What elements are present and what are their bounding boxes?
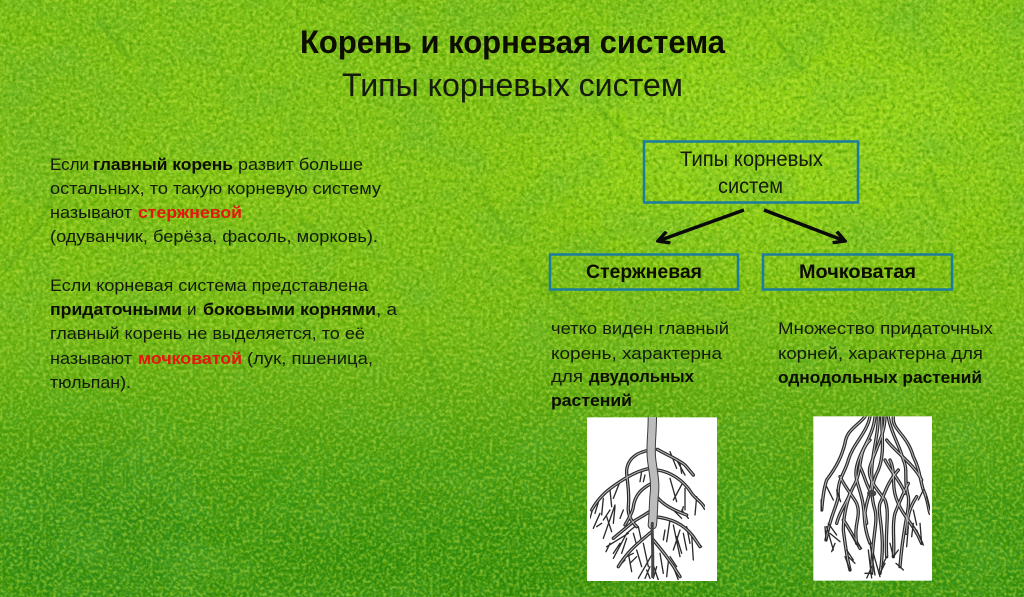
text block: root system descriptions: развит больше — [238, 155, 363, 174]
title: Корень и корневая система — [300, 24, 725, 60]
text block: root system descriptions: мочковатой — [138, 349, 242, 368]
diagram box: taproot — [550, 254, 738, 290]
title: Типы корневых систем — [342, 67, 683, 103]
text block: root system descriptions: тюльпан). — [50, 373, 131, 392]
text block: root system descriptions: остальных, то такую корневую систему — [50, 179, 382, 198]
text block: taproot description — [551, 319, 729, 410]
text block: root system descriptions: Если корневая система представлена — [50, 276, 369, 295]
text block: root system descriptions: (одуванчик, берёза, фасоль, морковь). — [50, 227, 378, 246]
text block: fibrous description: Множество придаточных — [778, 319, 994, 338]
text block: taproot description: корень, характерна — [551, 344, 723, 363]
diagram box: fibrous: Мочковатая — [799, 261, 916, 283]
illustration: fibrous root system — [813, 416, 932, 581]
text block: root system descriptions: главный корень — [93, 155, 233, 174]
text block: taproot description: четко виден главный — [551, 319, 729, 338]
text block: root system descriptions: Если — [50, 155, 89, 174]
text block: root system descriptions: называют — [50, 203, 132, 222]
text block: root system descriptions: называют — [50, 349, 132, 368]
diagram box: root system types: Типы корневых — [680, 148, 823, 171]
text block: fibrous description: однодольных растений — [778, 368, 982, 387]
arrow: to fibrous system — [764, 210, 845, 241]
text block: taproot description: для — [551, 367, 583, 386]
text block: root system descriptions: стержневой — [138, 203, 242, 222]
diagram box: taproot: Стержневая — [586, 261, 702, 283]
diagram box: fibrous — [763, 254, 952, 290]
text block: root system descriptions: главный корень не выделяется, то её — [50, 324, 365, 343]
text block: root system descriptions — [50, 155, 398, 392]
illustration: taproot system — [587, 417, 717, 581]
text block: root system descriptions: придаточными — [50, 300, 182, 319]
text block: root system descriptions: , а — [376, 300, 398, 319]
diagram box: root system types — [644, 142, 858, 202]
text block: taproot description: двудольных — [589, 367, 695, 386]
text block: taproot description: растений — [551, 391, 632, 410]
arrow: to taproot system — [658, 210, 744, 241]
text block: root system descriptions: и — [187, 300, 196, 319]
text block: fibrous description: корней, характерна для — [778, 344, 983, 363]
text block: fibrous description — [778, 319, 994, 387]
text block: root system descriptions: (лук, пшеница, — [247, 349, 373, 368]
text block: root system descriptions: боковыми корнями — [203, 300, 376, 319]
diagram box: root system types: систем — [718, 175, 783, 198]
title — [300, 24, 725, 103]
